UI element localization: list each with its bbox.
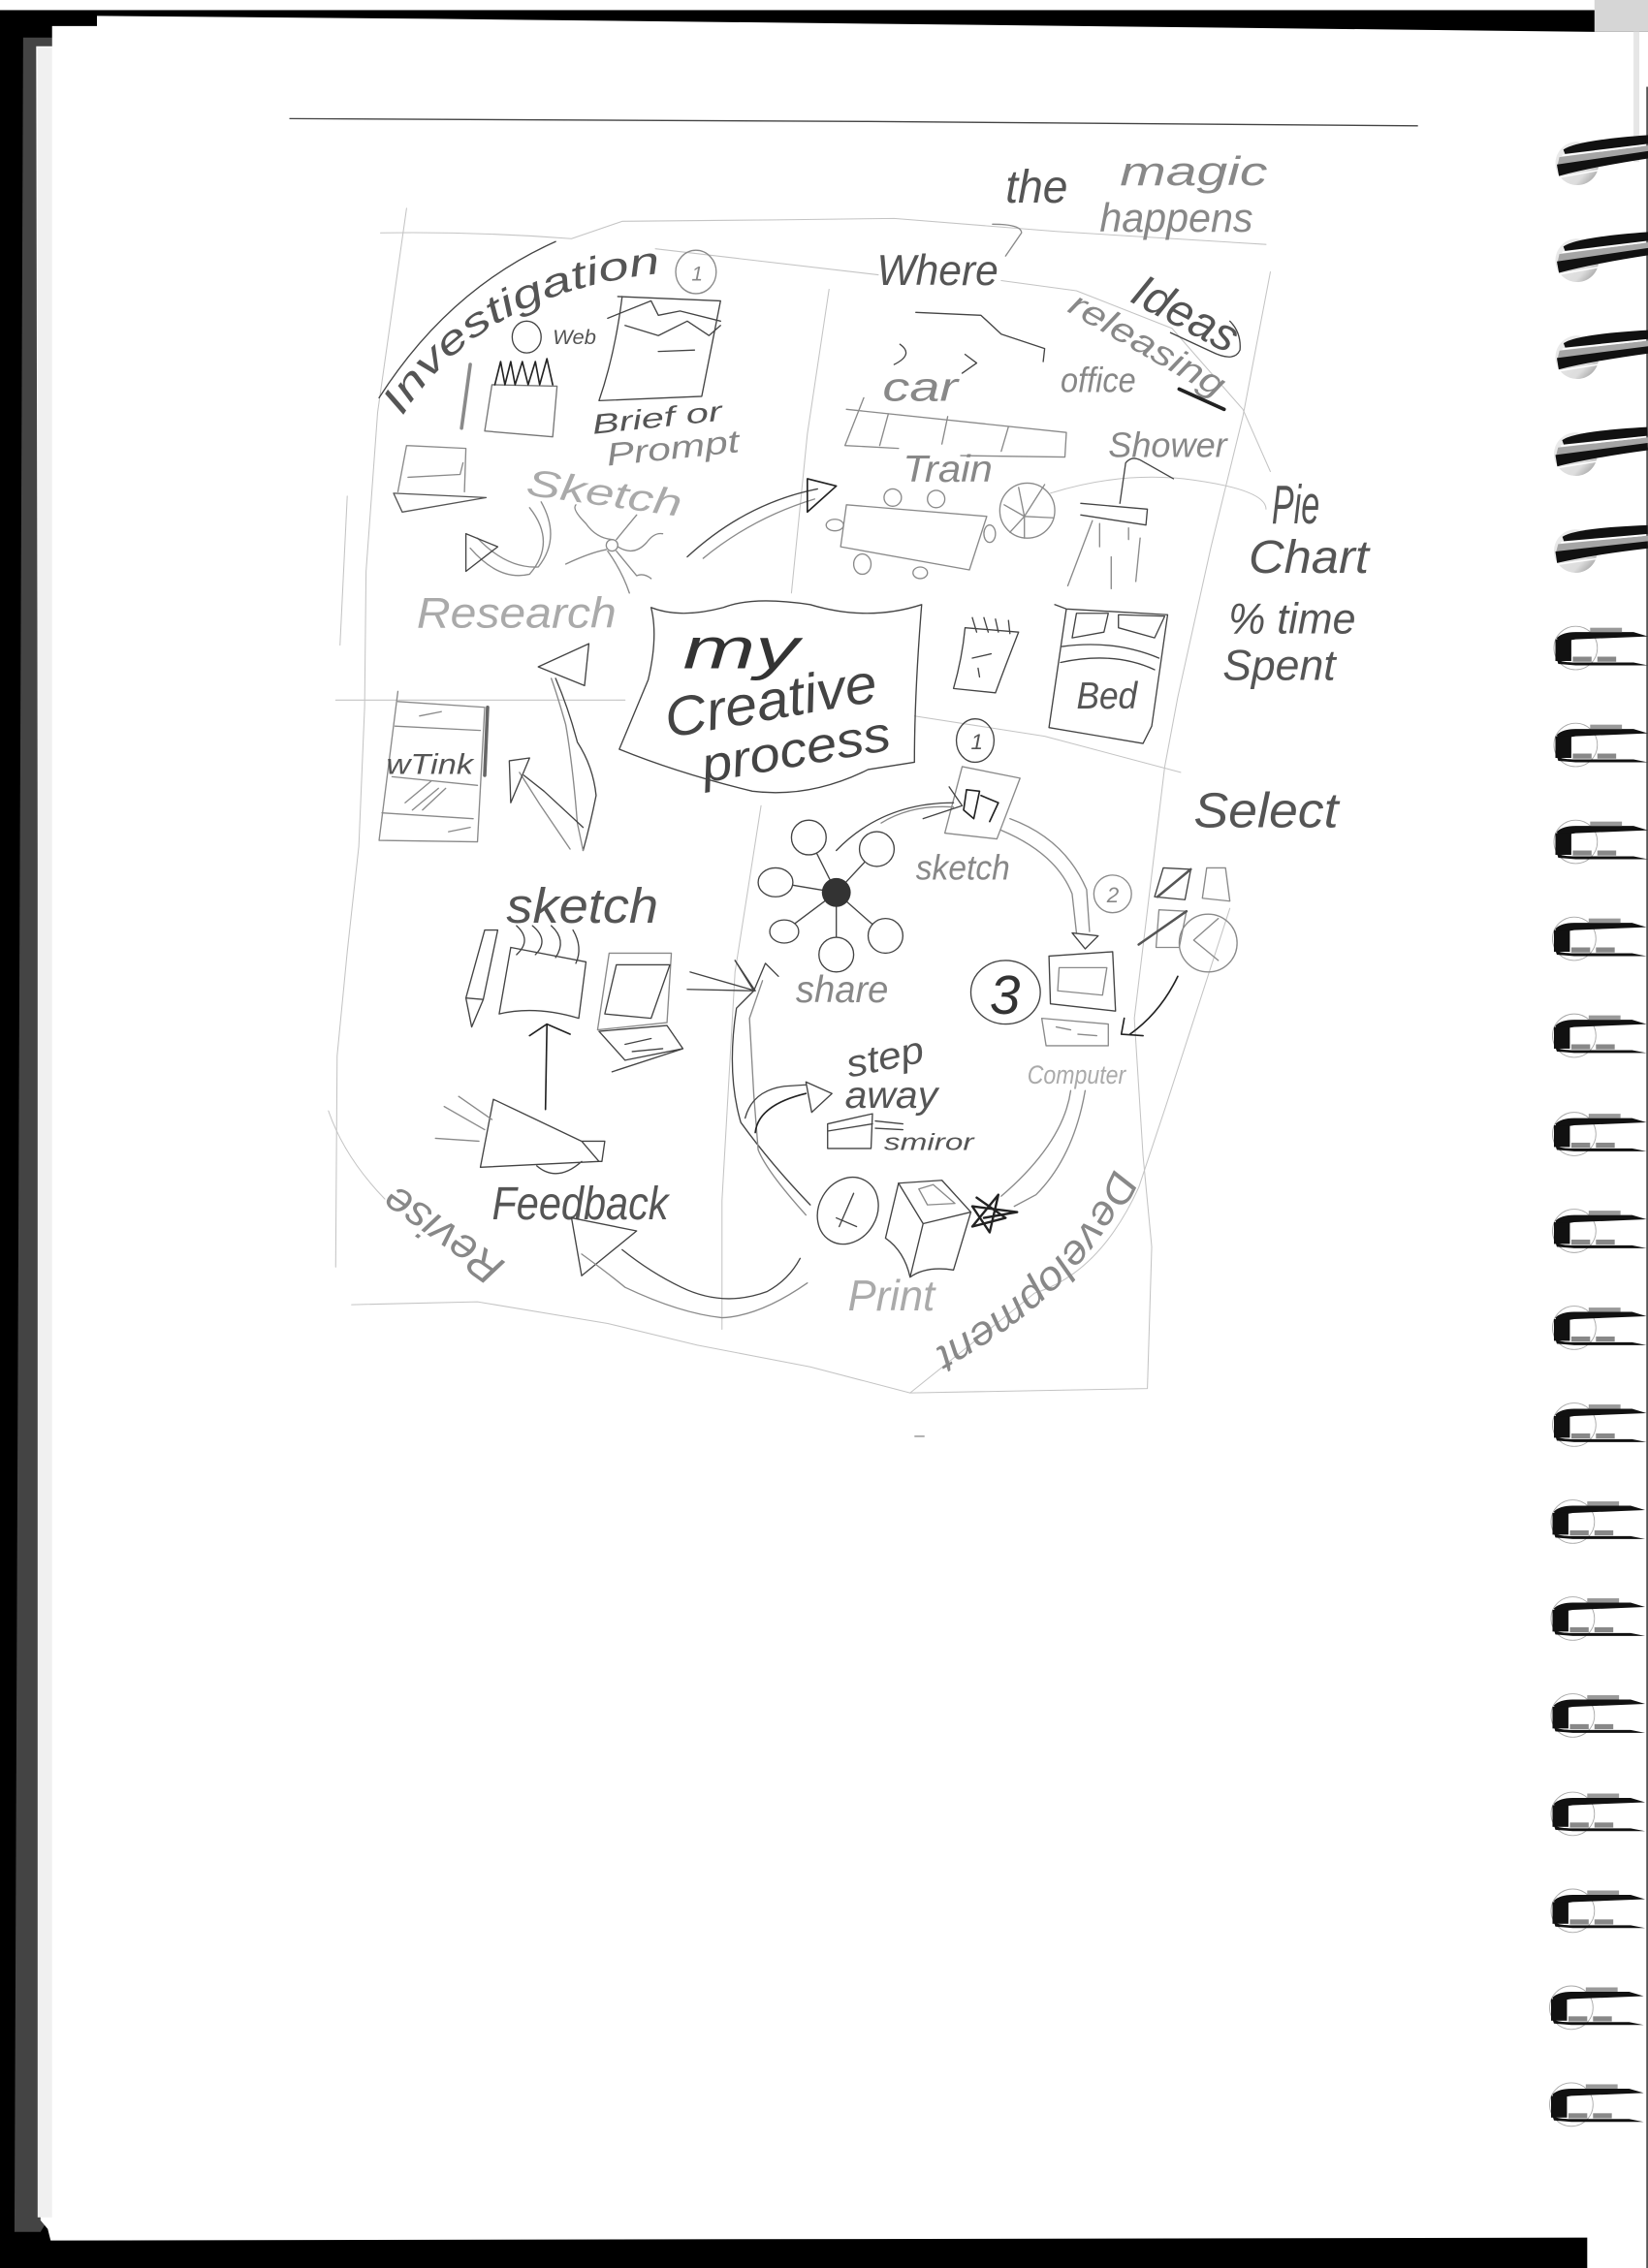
arrow: print to share: [732, 961, 810, 1215]
label: Shower: Shower: [1108, 426, 1229, 465]
label: sketch: sketch: [506, 878, 658, 933]
icon: laptop: [394, 446, 486, 512]
road line: [916, 312, 1045, 362]
arrow: up to research: [509, 644, 596, 851]
callout: pie chart percent time spent: % time: [1228, 595, 1356, 644]
arrow: computer to print: [1001, 1090, 1085, 1207]
arrow: feedback to sketch: [529, 1024, 570, 1110]
callout: pie chart percent time spent: Pie: [1272, 475, 1319, 536]
label: Ideas: Ideas: [1124, 265, 1248, 363]
crossed-out word: [1062, 284, 1232, 409]
label: Feedback: Feedback: [491, 1179, 670, 1230]
number 1 badge: [676, 250, 716, 294]
icon: sketchbook: [485, 359, 557, 437]
number 3 badge: 3: [990, 965, 1021, 1026]
icon: bed: [1049, 605, 1167, 743]
heading: Development: Development: [936, 1170, 1136, 1372]
car chevrons: [894, 344, 976, 373]
icon: web globe: [512, 321, 541, 353]
arrow: small up: [993, 224, 1022, 256]
panel: investigation: [378, 240, 838, 638]
title box: [619, 601, 922, 794]
icon: shower: [1067, 458, 1173, 588]
label: Bed: Bed: [1076, 676, 1138, 717]
investigation arc: [379, 241, 555, 397]
callout: pie chart percent time spent: Spent: [1222, 641, 1337, 689]
icon: notebook: [954, 617, 1019, 693]
arrowhead scribble: [972, 1195, 1017, 1232]
number 2 badge: [1093, 875, 1131, 913]
icon: mixer: [828, 1114, 903, 1149]
label: Print: Print: [848, 1272, 936, 1320]
spiral binding: [1550, 135, 1648, 2126]
icon: pencil: [461, 364, 470, 428]
number 1 badge: 1: [970, 730, 983, 754]
number 3 badge: [970, 961, 1040, 1026]
arrow: back to feedback: [572, 1218, 808, 1318]
number 2 badge: 2: [1106, 883, 1120, 907]
arrow: to share: [687, 961, 755, 991]
frame lines: [329, 208, 1270, 1393]
top rule: [290, 118, 1418, 126]
label: office: office: [1061, 361, 1136, 399]
label: away: away: [845, 1075, 940, 1117]
icon: pie chart: [999, 483, 1055, 538]
title: Creative: Creative: [660, 653, 881, 750]
label: step: step: [842, 1029, 928, 1087]
ideas oval: [1170, 321, 1240, 357]
label: share: share: [796, 969, 888, 1011]
label: Sketch: Sketch: [524, 462, 684, 525]
heading: magic: magic: [1120, 148, 1268, 194]
label: Select: Select: [1193, 783, 1341, 838]
arrow: select to computer: [1122, 976, 1178, 1036]
icon: select shapes: [1139, 867, 1237, 972]
callout: pie chart percent time spent: Chart: [1249, 532, 1371, 583]
label: Revise: Revise: [373, 1176, 512, 1294]
icon: network share: [758, 820, 903, 972]
icon: sketch paper: [499, 926, 586, 1019]
icon: computer: [597, 953, 682, 1072]
label: sketch: sketch: [916, 848, 1010, 887]
icon: car top view: [826, 488, 996, 579]
panel: investigation: Prompt: [605, 423, 744, 472]
icon: train: [845, 397, 1066, 457]
icon: megaphone: [435, 1096, 605, 1174]
label: Research: Research: [417, 589, 617, 638]
crossed-out word: releasing: [1062, 284, 1232, 404]
arrow: to where: [687, 479, 837, 558]
number 1 badge: 1: [691, 264, 703, 286]
arrow: return to research: [466, 502, 551, 576]
panel: revise: [373, 644, 808, 1318]
label: wTink: wTink: [387, 748, 475, 780]
callout: pie chart percent time spent: [1222, 475, 1371, 689]
label: Web: Web: [553, 327, 596, 349]
label: Train: Train: [903, 449, 993, 490]
arrow: sketch to computer: [1001, 819, 1098, 949]
title: my: my: [682, 615, 804, 680]
label: Computer: Computer: [1028, 1060, 1126, 1089]
title: process: process: [695, 706, 895, 794]
heading: Investigation: Investigation: [385, 254, 657, 415]
number 4 badge: [806, 1166, 890, 1255]
panel: where the magic happens: [826, 148, 1268, 743]
icon: mind map spider: [566, 505, 663, 593]
label: car: car: [882, 363, 961, 409]
icon: printer: [885, 1181, 970, 1277]
number 1 badge: [957, 719, 994, 762]
icon: pencil: [466, 930, 497, 1027]
icon: brief paper: [599, 297, 720, 400]
icon: computer: [1042, 952, 1116, 1046]
heading: Where: Where: [876, 246, 998, 295]
label: Brief or Prompt: Brief or: [590, 396, 726, 441]
heading: happens: happens: [1099, 195, 1253, 240]
heading: the: the: [1005, 162, 1067, 213]
table sheet: [379, 691, 488, 842]
arrow: share to sketch: [837, 787, 963, 851]
arrow: to step away: [745, 1082, 832, 1133]
label: swimmer: smiror: [884, 1129, 975, 1155]
page smudge: [914, 1435, 925, 1437]
panel: development cycle: [731, 718, 1341, 1372]
icon: sketch sheet: [945, 767, 1020, 839]
